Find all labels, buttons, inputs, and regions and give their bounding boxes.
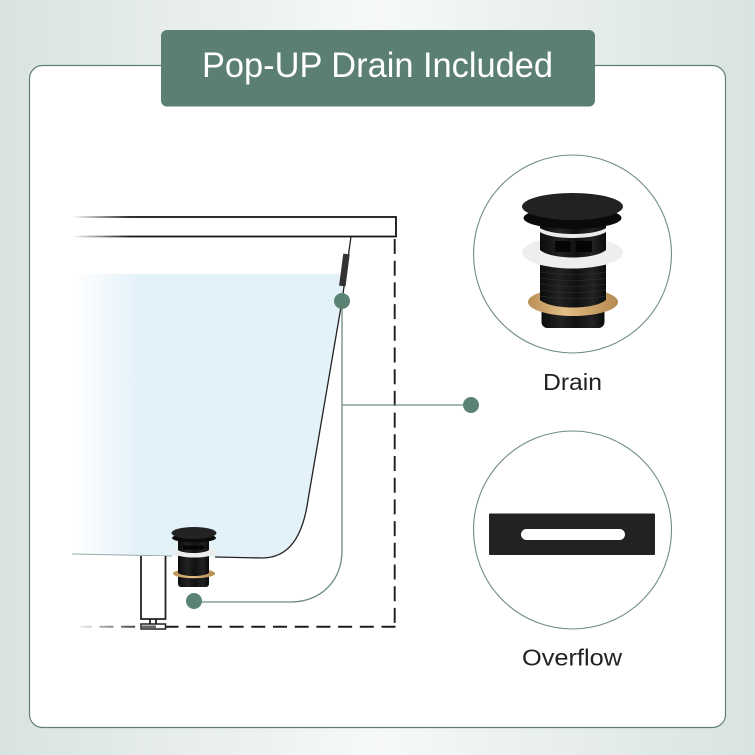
- drain product photo: [522, 193, 623, 328]
- marker: callout: [463, 397, 479, 413]
- cap rim: [172, 534, 216, 542]
- cap top: [172, 527, 216, 539]
- title banner: [161, 30, 595, 106]
- label: Drain: Drain: [543, 369, 602, 395]
- tub bottom line: [72, 554, 172, 556]
- overflow pipe fitting: [342, 254, 346, 286]
- water fill: [72, 274, 345, 558]
- upper body: [178, 538, 209, 553]
- threads: [540, 272, 606, 298]
- title banner: Pop-UP Drain Included: [202, 46, 553, 85]
- small drain in diagram: [172, 527, 217, 587]
- tub leg: [141, 556, 166, 624]
- dashed outline: side: [394, 239, 396, 623]
- gold ring: [173, 569, 215, 578]
- tub wall: [215, 236, 351, 558]
- cap top: [522, 193, 623, 220]
- dashed outline: floor: [80, 626, 396, 628]
- gold ring: [528, 288, 618, 316]
- white flange: [172, 546, 217, 558]
- slots: [555, 241, 570, 252]
- overflow product photo: [489, 514, 655, 555]
- marker: overflow: [334, 293, 350, 309]
- lower body: [178, 552, 209, 587]
- tub rim: [72, 217, 396, 236]
- panel: drain circle: [474, 155, 672, 353]
- white seal: [540, 228, 606, 238]
- diagram: bathtub cross-section: [72, 217, 396, 629]
- white flange: [522, 236, 623, 268]
- upper body: [540, 226, 606, 258]
- panel: overflow circle: [474, 431, 672, 629]
- leg foot: [141, 624, 166, 629]
- label: Overflow: Overflow: [522, 644, 622, 670]
- lower body: [542, 262, 604, 328]
- cap rim: [524, 207, 622, 229]
- connector lines: [194, 301, 471, 602]
- marker: drain: [186, 593, 202, 609]
